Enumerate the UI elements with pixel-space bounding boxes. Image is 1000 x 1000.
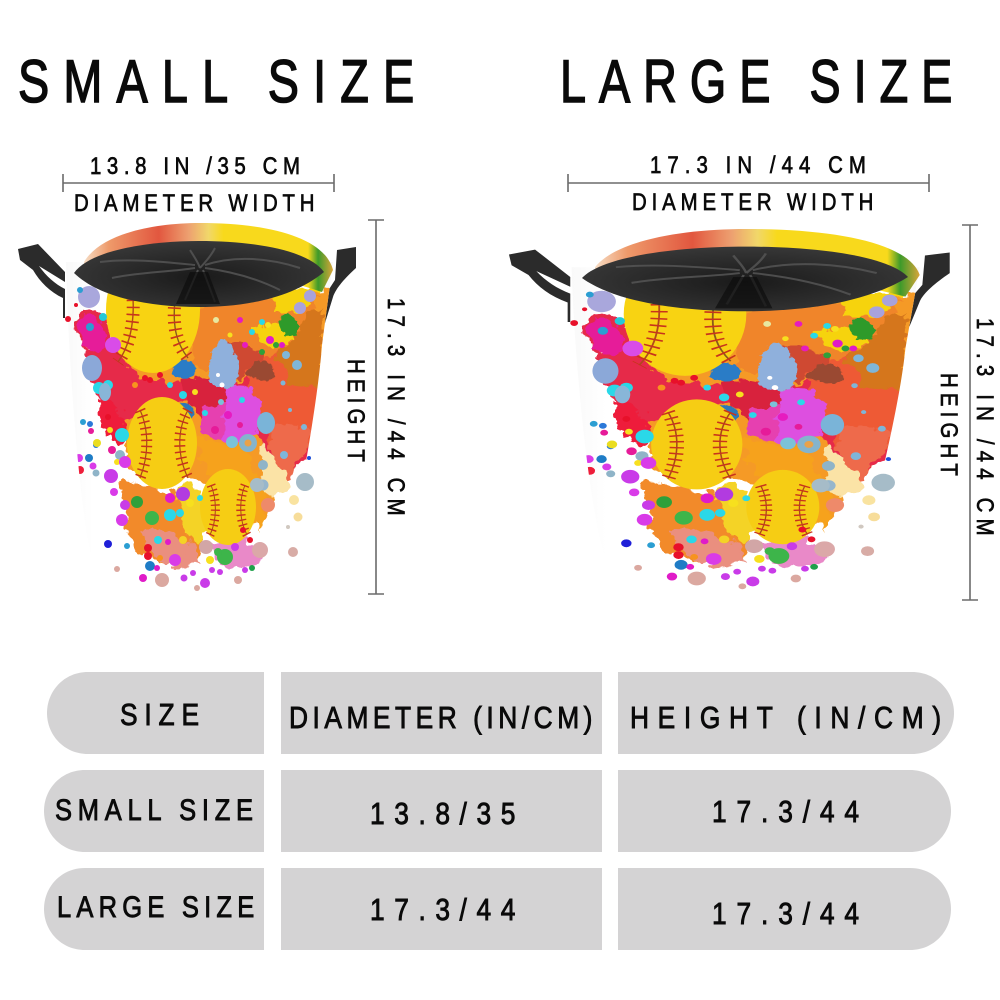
large height measurement	[936, 225, 999, 600]
large diameter measurement	[568, 151, 929, 215]
small size row: 13.8/35	[370, 797, 515, 832]
large size row	[44, 868, 951, 950]
title: small size: SMALL SIZE	[18, 48, 414, 115]
size table	[44, 672, 954, 950]
large height measurement: 17.3 IN /44 CM	[972, 318, 999, 536]
small diameter measurement: DIAMETER WIDTH	[74, 189, 315, 216]
small size row	[44, 770, 951, 852]
small size row: SMALL SIZE	[55, 793, 253, 826]
large basket	[509, 229, 950, 595]
large diameter measurement: DIAMETER WIDTH	[632, 188, 873, 215]
large size row: LARGE SIZE	[57, 890, 254, 923]
large height measurement: HEIGHT	[936, 373, 963, 476]
small diameter measurement: 13.8 IN /35 CM	[90, 152, 300, 179]
header row	[47, 672, 954, 754]
small diameter measurement	[63, 152, 334, 216]
small height measurement: 17.3 IN /44 CM	[383, 298, 410, 516]
large size row: 17.3/44	[712, 897, 859, 932]
large size row: 17.3/44	[370, 893, 515, 928]
small size row: 17.3/44	[712, 795, 859, 830]
small basket	[18, 223, 356, 597]
header row: SIZE	[120, 698, 199, 733]
small height measurement	[343, 220, 410, 594]
small height measurement: HEIGHT	[343, 359, 370, 462]
header row: HEIGHT (IN/CM)	[630, 701, 941, 736]
large diameter measurement: 17.3 IN /44 CM	[650, 151, 866, 178]
title: large size: LARGE SIZE	[560, 48, 952, 115]
header row: DIAMETER (IN/CM)	[289, 701, 592, 736]
